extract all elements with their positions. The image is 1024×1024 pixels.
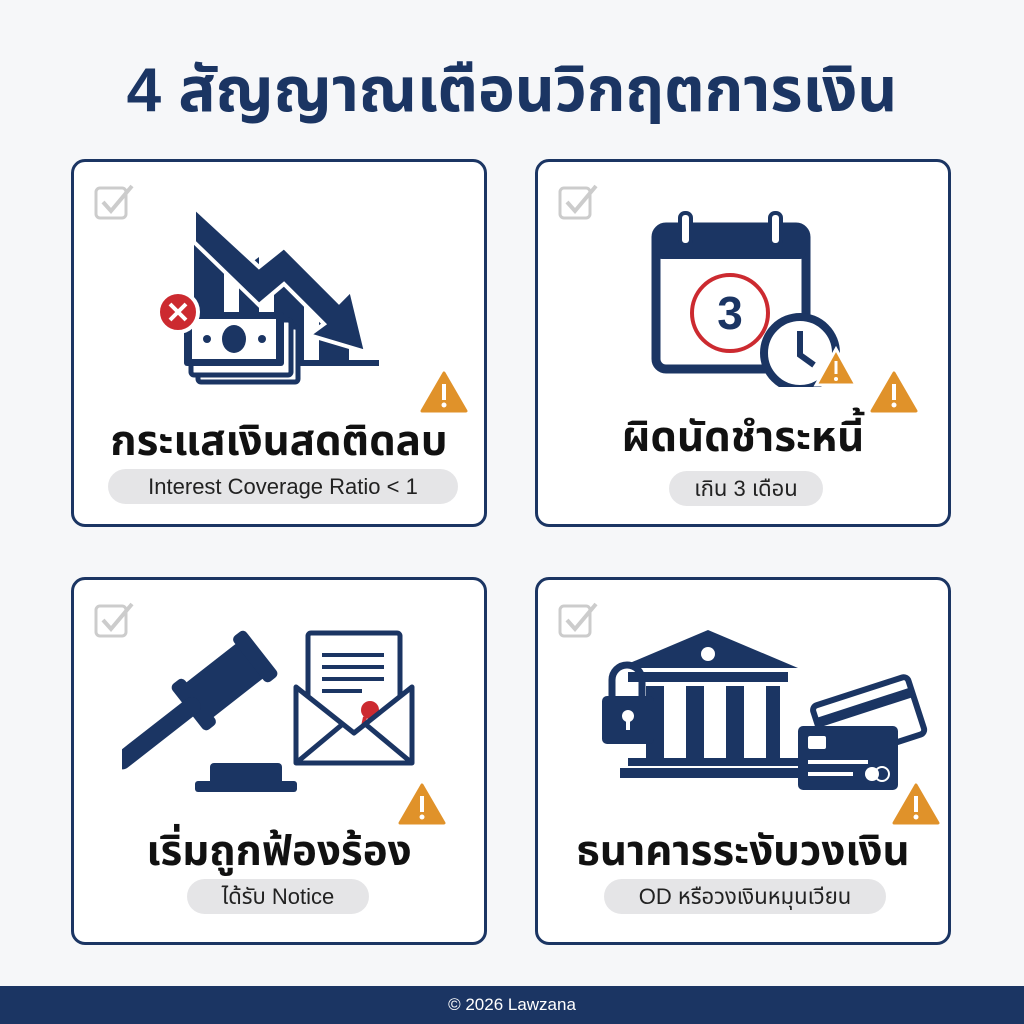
title: 4 สัญญาณเตือนวิกฤตการเงิน [127, 56, 897, 125]
icon: warning [892, 783, 940, 824]
icon: checkbox [94, 185, 134, 220]
panel: bank freezes credit [535, 577, 951, 945]
pill: ICR: Interest Coverage Ratio < 1 [148, 474, 418, 499]
panel: lawsuit [71, 577, 487, 945]
icon: checkbox [558, 185, 598, 220]
footer: © 2026 Lawzana [448, 995, 576, 1014]
icon: checkbox [94, 603, 134, 638]
panel: payment default [535, 159, 951, 527]
icon: calendar with clock: 3 [717, 287, 743, 339]
heading: เริ่มถูกฟ้องร้อง [146, 827, 412, 874]
icon: bank, lock and cards [602, 630, 928, 790]
icon: warning [420, 371, 468, 412]
pill: ICR [108, 469, 458, 504]
icon: checkbox [558, 603, 598, 638]
icon: warning [870, 371, 918, 412]
pill: notice: ได้รับ Notice [222, 884, 334, 909]
heading: ผิดนัดชำระหนี้ [622, 413, 864, 460]
icon: falling chart with money [160, 212, 379, 384]
pill: OD: OD หรือวงเงินหมุนเวียน [639, 884, 851, 909]
icon: calendar with clock [652, 211, 854, 387]
heading: ธนาคารระงับวงเงิน [576, 827, 910, 874]
pill: OD [604, 879, 886, 914]
icon: gavel and envelope [122, 630, 414, 792]
pill: over 3 months [669, 471, 823, 506]
pill: over 3 months: เกิน 3 เดือน [694, 476, 798, 501]
pill: notice [187, 879, 369, 914]
panel: negative cash flow [71, 159, 487, 527]
heading: กระแสเงินสดติดลบ [110, 417, 448, 464]
icon: warning [398, 783, 446, 824]
footer [0, 986, 1024, 1024]
